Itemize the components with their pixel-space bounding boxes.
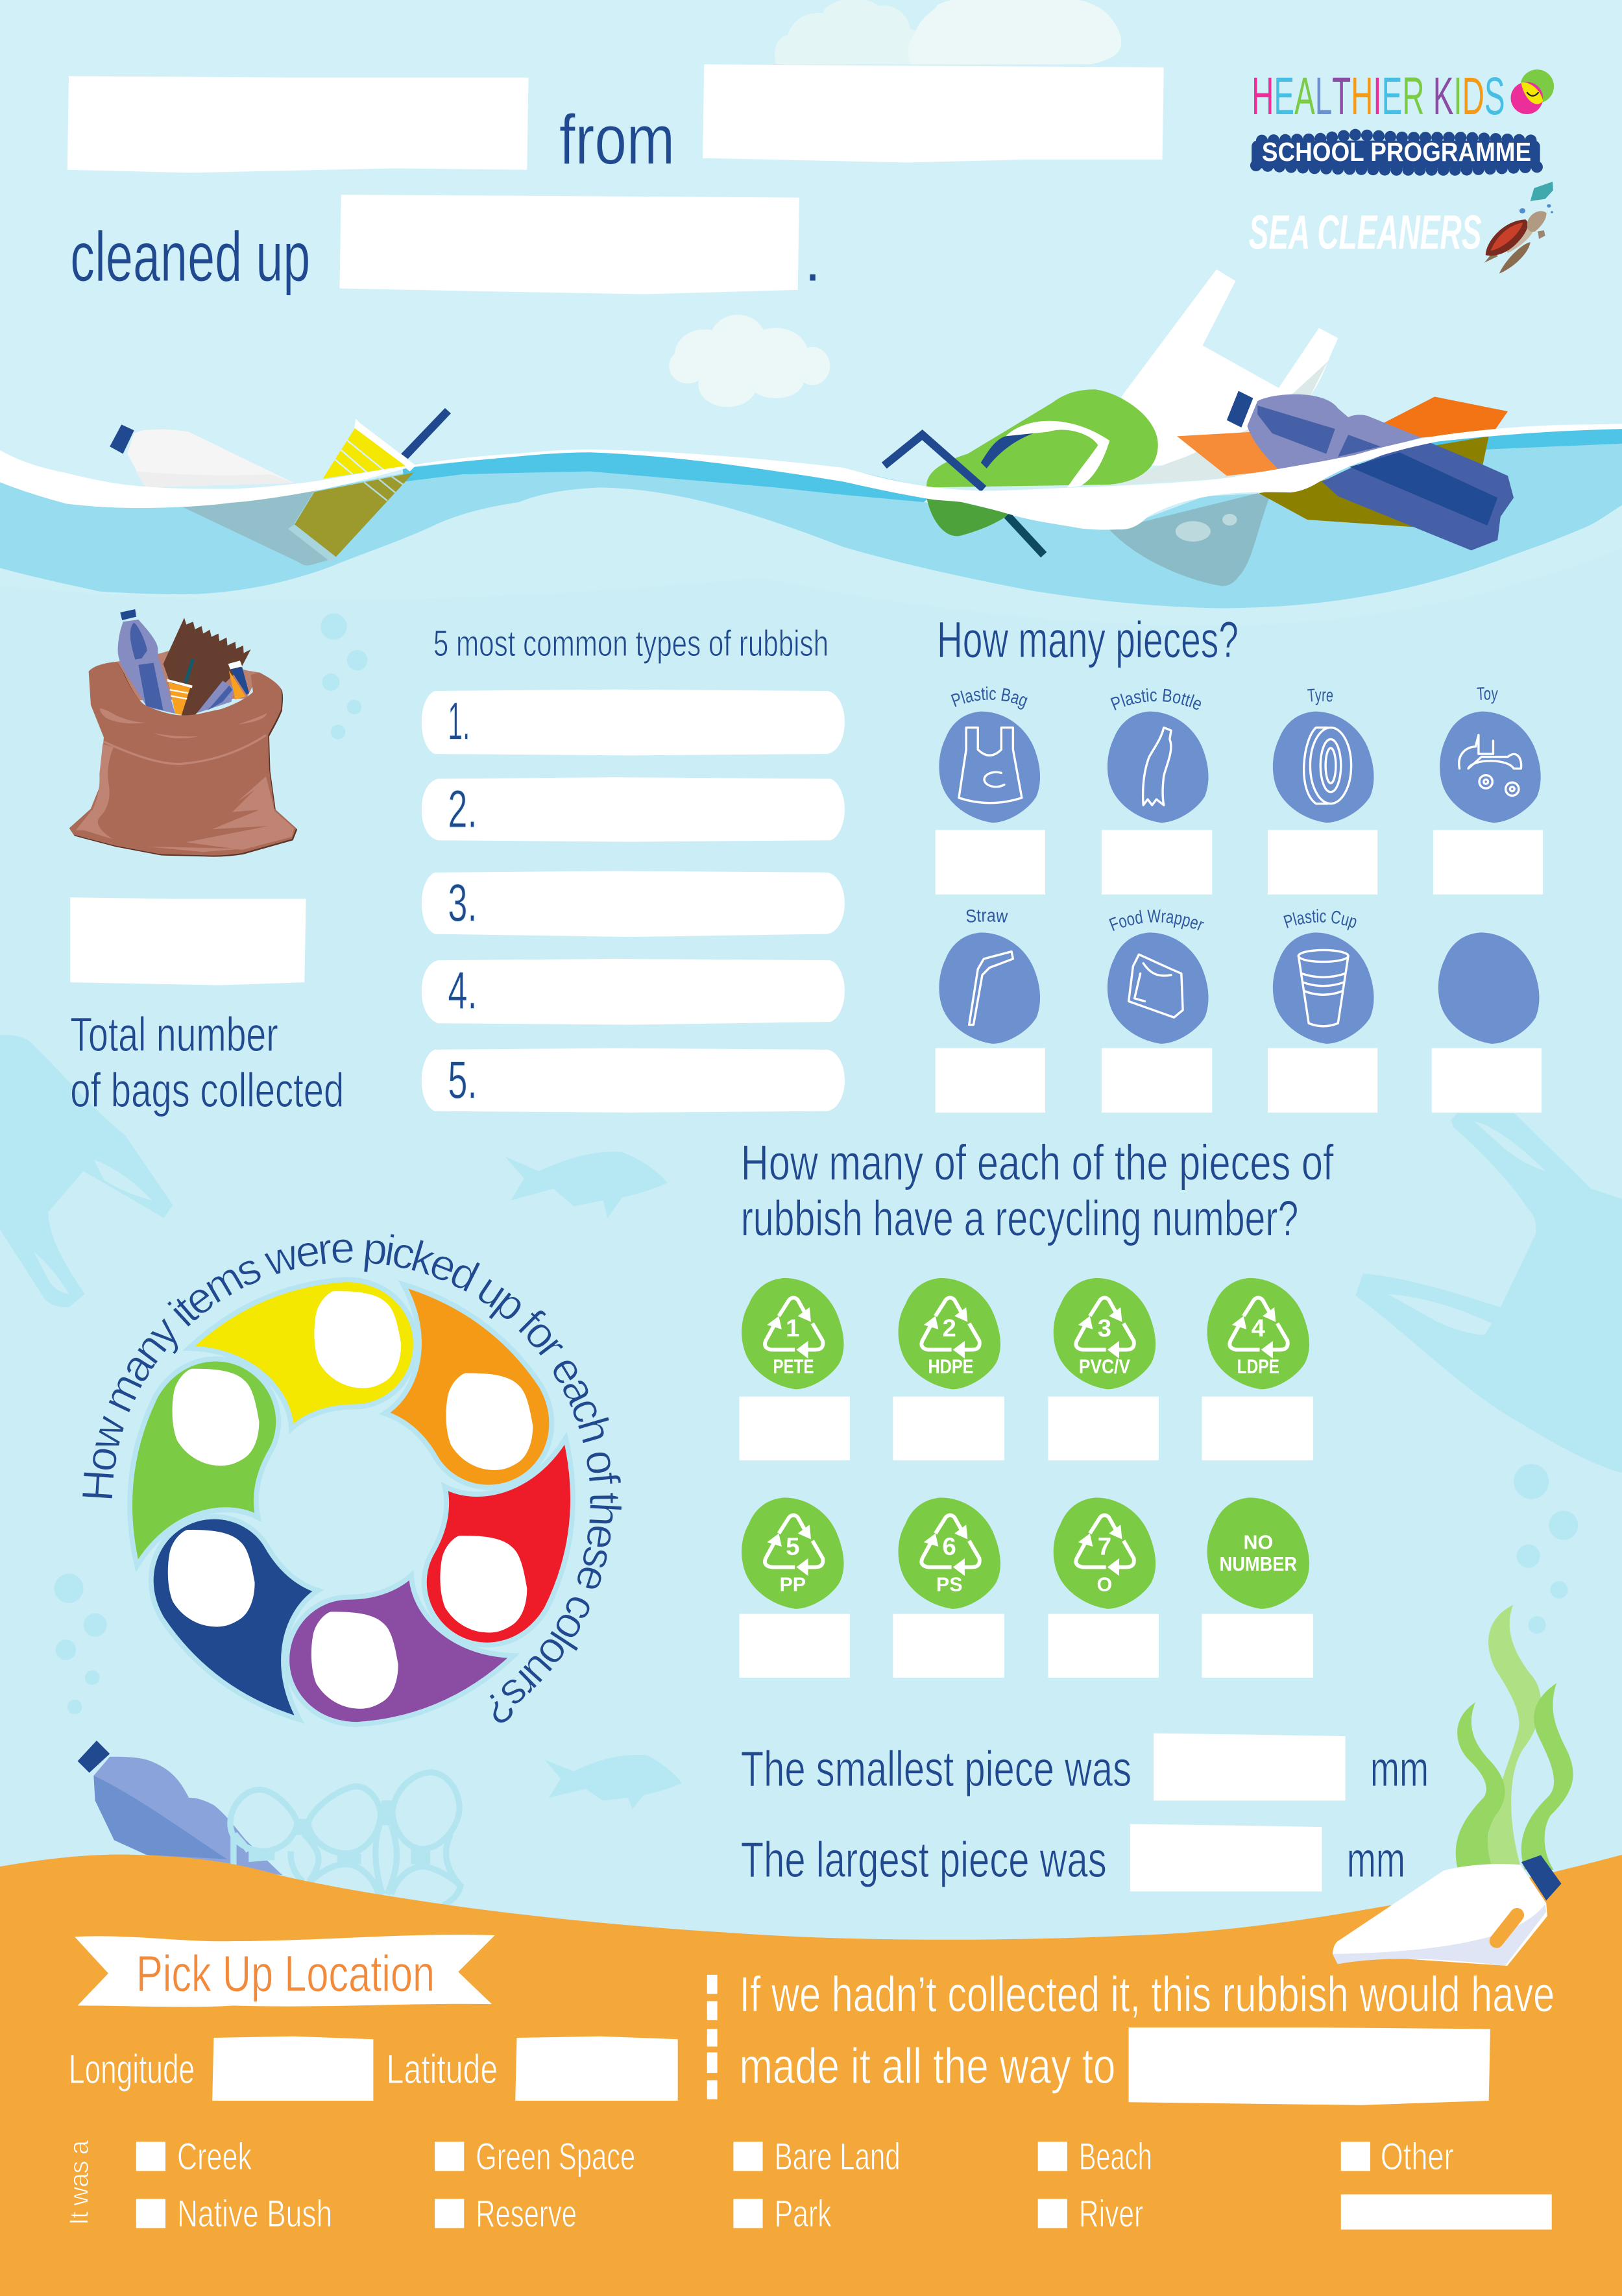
sky background xyxy=(0,0,1622,498)
bottle cap xyxy=(1227,391,1253,428)
left bottle xyxy=(110,424,328,566)
code 6: 6 xyxy=(943,1532,956,1560)
full stop: . xyxy=(804,223,821,295)
bubbles left xyxy=(54,1574,107,1714)
bare land xyxy=(733,2136,901,2178)
code 3: 3 xyxy=(1098,1314,1111,1342)
colour wheel xyxy=(82,1234,622,1727)
river: River xyxy=(1079,2193,1143,2235)
row 2: 2. xyxy=(448,780,478,839)
beach xyxy=(1038,2136,1152,2178)
largest piece line: The largest piece was xyxy=(741,1833,1107,1888)
segment: red xyxy=(383,1398,625,1669)
circular question: How many items were picked up for each of these colours? xyxy=(82,1234,622,1723)
rock xyxy=(1531,182,1553,201)
code 7: O xyxy=(1097,1574,1112,1596)
heading: recycling number xyxy=(741,1136,1334,1246)
white plastic bag xyxy=(1109,269,1338,586)
strap xyxy=(1006,421,1109,487)
creek: Creek xyxy=(177,2136,252,2178)
straw tile xyxy=(936,910,1045,1113)
river xyxy=(1038,2193,1143,2235)
turtle xyxy=(1484,182,1553,274)
bottom-left bottle xyxy=(78,1741,282,1875)
no number xyxy=(1202,1497,1313,1678)
code 2 xyxy=(893,1278,1004,1460)
total number label: Total number xyxy=(70,1008,278,1061)
total number label: of bags collected xyxy=(70,1063,344,1117)
row 4 xyxy=(422,959,845,1025)
rubbish sack xyxy=(69,609,297,857)
name blank 2 xyxy=(703,64,1164,162)
segment: orange xyxy=(333,1250,576,1521)
name blank 1 xyxy=(67,76,529,173)
code 2: 2 xyxy=(943,1314,956,1342)
sack contents xyxy=(89,609,260,716)
largest piece line xyxy=(741,1824,1405,1891)
green space xyxy=(435,2136,635,2178)
sand xyxy=(0,1855,1622,2296)
code 1: 1 xyxy=(786,1314,799,1342)
smallest piece line xyxy=(741,1734,1429,1800)
smallest piece line: mm xyxy=(1370,1742,1429,1797)
six-pack rings xyxy=(230,1772,461,1905)
row 4: 4. xyxy=(448,961,478,1021)
code 1: PETE xyxy=(773,1356,814,1378)
plastic cup tile xyxy=(1268,909,1378,1113)
blank tile xyxy=(1432,932,1542,1113)
bright wave band right xyxy=(1405,424,1622,455)
rubbish list xyxy=(422,690,845,1113)
plastic cup tile: Plastic Cup xyxy=(1283,909,1356,930)
location checklist xyxy=(136,2136,1552,2235)
cleaned up: cleaned up xyxy=(70,217,310,296)
segment: green xyxy=(77,1335,320,1606)
row 5 xyxy=(422,1048,845,1113)
plastic bottle tile xyxy=(1102,688,1212,895)
row 1: 1. xyxy=(448,692,470,751)
row 3 xyxy=(422,871,845,937)
smallest piece line: The smallest piece was xyxy=(741,1742,1132,1797)
heading: recycling number: rubbish have a recycling number? xyxy=(741,1191,1298,1246)
bubbles right xyxy=(1514,1464,1578,1634)
code 5: PP xyxy=(779,1574,806,1596)
reserve: Reserve xyxy=(476,2193,577,2235)
code 3 xyxy=(1048,1278,1159,1460)
green space: Green Space xyxy=(476,2136,635,2178)
pieces grid xyxy=(936,686,1543,1113)
bottle cap xyxy=(110,424,134,453)
heading: how many pieces: How many pieces? xyxy=(937,611,1239,668)
recycling grid xyxy=(739,1278,1313,1678)
orange box xyxy=(1177,396,1508,527)
bubbles top left xyxy=(321,613,367,740)
statement xyxy=(739,1967,1555,2105)
underwater bag xyxy=(1109,493,1269,586)
total number label xyxy=(70,1008,344,1117)
beach: Beach xyxy=(1079,2136,1152,2178)
sack body xyxy=(70,663,297,857)
water lightest layer xyxy=(0,476,1622,625)
code 2: HDPE xyxy=(928,1356,973,1378)
longitude xyxy=(69,2036,373,2101)
plastic bag tile: Plastic Bag xyxy=(951,686,1028,710)
other xyxy=(1341,2136,1454,2178)
code 6: PS xyxy=(936,1574,963,1596)
reserve xyxy=(435,2193,577,2235)
dashed divider xyxy=(707,1975,718,2099)
tyre tile: Tyre xyxy=(1307,689,1333,705)
plastic bottle tile: Plastic Bottle xyxy=(1111,688,1201,710)
banner: pick up location: Pick Up Location xyxy=(136,1945,435,2002)
code 5: 5 xyxy=(786,1532,799,1560)
background fish top xyxy=(505,1152,668,1218)
code 4: 4 xyxy=(1252,1314,1266,1342)
water body xyxy=(0,433,1622,609)
creek xyxy=(136,2136,252,2178)
code 4: LDPE xyxy=(1237,1356,1279,1378)
top clouds xyxy=(775,0,1121,64)
answer holes xyxy=(168,1291,533,1709)
row 2 xyxy=(422,777,845,841)
seaweed xyxy=(1456,1605,1573,1870)
flip-flop xyxy=(926,389,1158,536)
floating blue bottle xyxy=(1227,391,1514,550)
it was a: It was a xyxy=(64,2140,93,2225)
segment: blue xyxy=(127,1483,369,1754)
bent straw xyxy=(884,435,1044,555)
code 7 xyxy=(1048,1497,1159,1678)
background silhouette: plastic bag left xyxy=(0,1035,173,1307)
latitude xyxy=(387,2036,678,2101)
tyre tile xyxy=(1268,689,1378,895)
toy tile: Toy xyxy=(1477,687,1498,704)
jug on sand xyxy=(1333,1855,1562,1966)
sack folds xyxy=(76,708,294,852)
logo: school programme: SCHOOL PROGRAMME xyxy=(1262,137,1531,167)
native bush xyxy=(136,2193,332,2235)
from: from xyxy=(559,101,675,179)
lower water background xyxy=(0,490,1622,2296)
logo circles xyxy=(1511,69,1554,114)
food wrapper tile xyxy=(1102,910,1212,1113)
total bags blank xyxy=(70,897,306,985)
middle cloud xyxy=(669,315,830,407)
other blank xyxy=(1341,2194,1552,2230)
code 5 xyxy=(739,1497,850,1678)
code 3: PVC/V xyxy=(1079,1356,1130,1378)
jug cap xyxy=(1521,1855,1562,1900)
no number: NUMBER xyxy=(1220,1553,1297,1575)
latitude: Latitude xyxy=(387,2047,498,2092)
white wave crest xyxy=(0,424,1622,530)
plastic bag tile xyxy=(936,686,1045,895)
park: Park xyxy=(775,2193,832,2235)
other: Other xyxy=(1381,2136,1454,2178)
native bush: Native Bush xyxy=(177,2193,332,2235)
no number: NO xyxy=(1243,1531,1273,1553)
logo: Healthier Kids: HEALTHIER KIDS xyxy=(1252,67,1505,126)
code 4 xyxy=(1202,1278,1313,1460)
logo: sea cleaners: SEA CLEANERS xyxy=(1249,206,1481,260)
statement: made it all the way to xyxy=(739,2039,1115,2094)
heading: recycling number: How many of each of the pieces of xyxy=(741,1136,1334,1191)
banner: pick up location xyxy=(75,1935,495,2007)
largest piece line: mm xyxy=(1347,1833,1405,1888)
bright wave band xyxy=(402,451,938,502)
background fish bottom xyxy=(544,1755,682,1809)
park xyxy=(733,2193,832,2235)
segment: purple xyxy=(287,1575,514,1724)
row 5: 5. xyxy=(448,1050,478,1109)
heading: five common types: 5 most common types of rubbish xyxy=(433,623,829,664)
toy tile xyxy=(1433,687,1543,895)
longitude: Longitude xyxy=(69,2047,195,2092)
straw tile: Straw xyxy=(967,910,1008,923)
left straw xyxy=(401,408,451,459)
left cup xyxy=(288,418,416,562)
food wrapper tile: Food Wrapper xyxy=(1109,910,1204,931)
row 3: 3. xyxy=(448,873,478,932)
bare land: Bare Land xyxy=(775,2136,901,2178)
background silhouette: plastic bag right xyxy=(1355,1113,1622,1473)
code 7: 7 xyxy=(1098,1532,1111,1560)
row 1 xyxy=(422,690,845,755)
code 1 xyxy=(739,1278,850,1460)
code 6 xyxy=(893,1497,1004,1678)
name blank 3 xyxy=(339,195,799,295)
segment: yellow xyxy=(189,1279,416,1429)
